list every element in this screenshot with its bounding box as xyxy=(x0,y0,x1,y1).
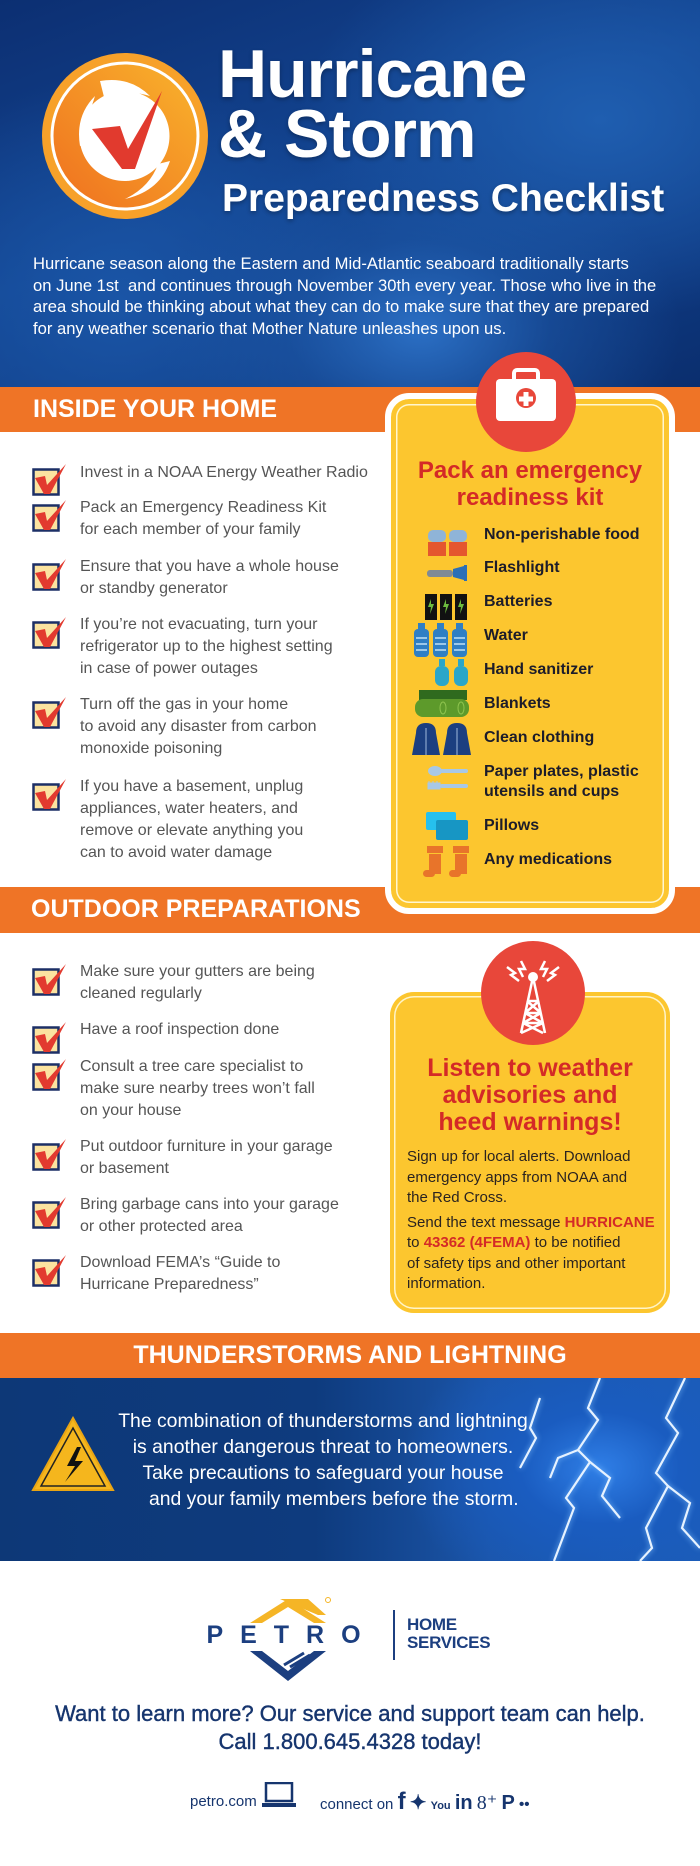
checkbox 1 xyxy=(32,964,66,996)
item 2: Have a roof inspection done xyxy=(80,1021,279,1038)
icon: batteries xyxy=(425,594,467,620)
icon: medications xyxy=(423,846,469,877)
icon: hurricane checkmark logo xyxy=(42,53,208,219)
item 4: Put outdoor furniture in your garage xyxy=(80,1138,333,1155)
item 5: Bring garbage cans into your garage xyxy=(80,1196,339,1213)
icon: pillows xyxy=(426,812,468,840)
intro text xyxy=(33,254,656,338)
icon: blankets xyxy=(415,690,469,717)
call to action: Want to learn more? Our service and support team can help. xyxy=(55,1701,645,1726)
divider xyxy=(393,1610,394,1660)
item 6: If you have a basement, unplug xyxy=(80,778,303,795)
heading: outdoor preparations: OUTDOOR PREPARATIONS xyxy=(31,895,361,923)
item: flashlight: Flashlight xyxy=(484,559,560,576)
checkbox 3 xyxy=(32,559,66,591)
checkbox 2 xyxy=(32,500,66,532)
call to action xyxy=(0,1700,700,1756)
checkbox 5 xyxy=(32,1197,66,1229)
item: medications: Any medications xyxy=(484,851,612,868)
icon: jackets xyxy=(412,723,471,755)
title: & Storm xyxy=(218,96,475,172)
item 6: Hurricane Preparedness” xyxy=(80,1276,259,1293)
icon: laptop xyxy=(262,1782,296,1808)
checkbox 5 xyxy=(32,697,66,729)
item 5: to avoid any disaster from carbon xyxy=(80,718,317,735)
item 3: make sure nearby trees won’t fall xyxy=(80,1080,315,1097)
item 6 xyxy=(80,778,303,861)
item 4 xyxy=(80,1138,333,1177)
subtitle: Preparedness Checklist xyxy=(222,177,664,220)
kit title xyxy=(418,457,642,511)
item 3: Ensure that you have a whole house xyxy=(80,558,339,575)
advisory body: of safety tips and other important xyxy=(407,1254,625,1272)
lightning text: Take precautions to safeguard your house xyxy=(142,1462,504,1484)
item 3 xyxy=(80,1058,315,1119)
home services text: HOME xyxy=(407,1615,457,1634)
item: water: Water xyxy=(484,627,528,644)
connect on + social icons: connect on f ✦ You in 8⁺ P •• xyxy=(320,1788,530,1815)
advisory title: advisories and xyxy=(442,1081,618,1109)
checkbox 2 xyxy=(32,1022,66,1054)
lightning text: The combination of thunderstorms and lightning xyxy=(118,1410,528,1432)
icon: water bottles xyxy=(414,623,467,657)
checkbox 4 xyxy=(32,617,66,649)
list: inside your home xyxy=(32,464,368,861)
logo: petro home services xyxy=(200,1595,520,1685)
item 6: remove or elevate anything you xyxy=(80,822,303,839)
advisory body: information. xyxy=(407,1275,485,1292)
item: clothing: Clean clothing xyxy=(484,729,594,746)
item 3: or standby generator xyxy=(80,580,228,597)
intro text: area should be thinking about what they can do to make sure that they are prepared xyxy=(33,297,649,316)
item 1: Make sure your gutters are being xyxy=(80,963,315,980)
icon: utensils xyxy=(428,766,468,790)
heading: outdoor preparations xyxy=(0,887,700,933)
lightning text: is another dangerous threat to homeowners. xyxy=(133,1436,513,1458)
item 2 xyxy=(80,499,326,538)
call to action: Call 1.800.645.4328 today! xyxy=(218,1729,481,1754)
item 4: refrigerator up to the highest setting xyxy=(80,638,333,655)
item 6: appliances, water heaters, and xyxy=(80,800,298,817)
advisory body xyxy=(407,1147,667,1294)
icon: hand sanitizer xyxy=(435,659,468,686)
item: batteries: Batteries xyxy=(484,593,552,610)
item 4: or basement xyxy=(80,1160,169,1177)
advisory body: to 43362 (4FEMA) to be notified xyxy=(407,1234,620,1251)
item 1 xyxy=(80,963,315,1002)
item 6: can to avoid water damage xyxy=(80,844,272,861)
advisory body: Sign up for local alerts. Download xyxy=(407,1148,630,1165)
item: blankets: Blankets xyxy=(484,695,551,712)
item 4: in case of power outages xyxy=(80,660,258,677)
heading: inside your home: INSIDE YOUR HOME xyxy=(33,395,277,423)
item 5: monoxide poisoning xyxy=(80,740,222,757)
item 5 xyxy=(80,696,317,757)
panel: weather advisories xyxy=(390,992,670,1313)
panel: emergency kit xyxy=(385,393,675,914)
item: paper plates: Paper plates, plastic xyxy=(484,763,639,780)
checkbox 4 xyxy=(32,1139,66,1171)
item 4: If you’re not evacuating, turn your xyxy=(80,616,317,633)
advisory body: the Red Cross. Send the text message HURRICANE xyxy=(407,1189,655,1230)
title xyxy=(218,36,527,172)
icon: radio tower circle xyxy=(481,941,585,1045)
home services text: SERVICES xyxy=(407,1633,490,1652)
panel: lightning xyxy=(0,1378,700,1561)
kit items xyxy=(412,526,640,877)
petro.com: petro.com xyxy=(190,1793,257,1810)
item: paper plates: utensils and cups xyxy=(484,783,619,800)
lightning text xyxy=(98,1408,548,1512)
icon: first aid kit circle xyxy=(476,352,576,452)
intro text: on June 1st and continues through November 30th every year. Those who live in the xyxy=(33,276,656,295)
advisory title: heed warnings! xyxy=(438,1108,622,1136)
hero background xyxy=(0,0,700,400)
checkbox 1 xyxy=(32,464,66,496)
title: Hurricane xyxy=(218,36,526,112)
icon: warning triangle xyxy=(31,1416,115,1492)
heading: thunderstorms and lightning xyxy=(0,1333,700,1378)
icon: flashlight xyxy=(427,565,467,581)
home services text xyxy=(407,1616,490,1652)
footer links xyxy=(190,1780,530,1814)
item 6: Download FEMA’s “Guide to xyxy=(80,1254,280,1271)
item 3: Consult a tree care specialist to xyxy=(80,1058,303,1075)
checkbox 6 xyxy=(32,779,66,811)
item 3: on your house xyxy=(80,1102,181,1119)
intro text: Hurricane season along the Eastern and Mid-Atlantic seaboard traditionally starts xyxy=(33,254,629,273)
lightning text: and your family members before the storm. xyxy=(149,1488,519,1510)
lightning bolts xyxy=(470,1378,700,1561)
item: food: Non-perishable food xyxy=(484,526,640,543)
item 4 xyxy=(80,616,333,677)
item: pillows: Pillows xyxy=(484,817,539,834)
item 5 xyxy=(80,1196,339,1235)
item 5: Turn off the gas in your home xyxy=(80,696,288,713)
logo: petro home services: PETRO xyxy=(206,1621,378,1649)
intro text: for any weather scenario that Mother Nature unleashes upon us. xyxy=(33,319,506,338)
item 1: Invest in a NOAA Energy Weather Radio xyxy=(80,464,368,481)
item 5: or other protected area xyxy=(80,1218,243,1235)
advisory title: Listen to weather xyxy=(427,1054,633,1082)
kit title: readiness kit xyxy=(457,484,603,511)
item 6 xyxy=(80,1252,280,1296)
advisory title xyxy=(390,1055,670,1136)
item 2: for each member of your family xyxy=(80,521,301,538)
item 1: cleaned regularly xyxy=(80,985,202,1002)
icon: cans xyxy=(428,530,467,556)
list: outdoor preparations xyxy=(32,963,339,1293)
checkbox 6 xyxy=(32,1255,66,1287)
heading: thunderstorms and lightning: THUNDERSTORMS AND LIGHTNING xyxy=(133,1341,567,1369)
item: sanitizer: Hand sanitizer xyxy=(484,661,593,678)
heading: inside your home xyxy=(0,387,700,432)
item 2: Pack an Emergency Readiness Kit xyxy=(80,499,326,516)
checkbox 3 xyxy=(32,1059,66,1091)
item: paper plates xyxy=(484,763,639,800)
item 3 xyxy=(80,558,339,597)
kit title: Pack an emergency xyxy=(418,457,642,484)
advisory body: emergency apps from NOAA and xyxy=(407,1168,627,1186)
